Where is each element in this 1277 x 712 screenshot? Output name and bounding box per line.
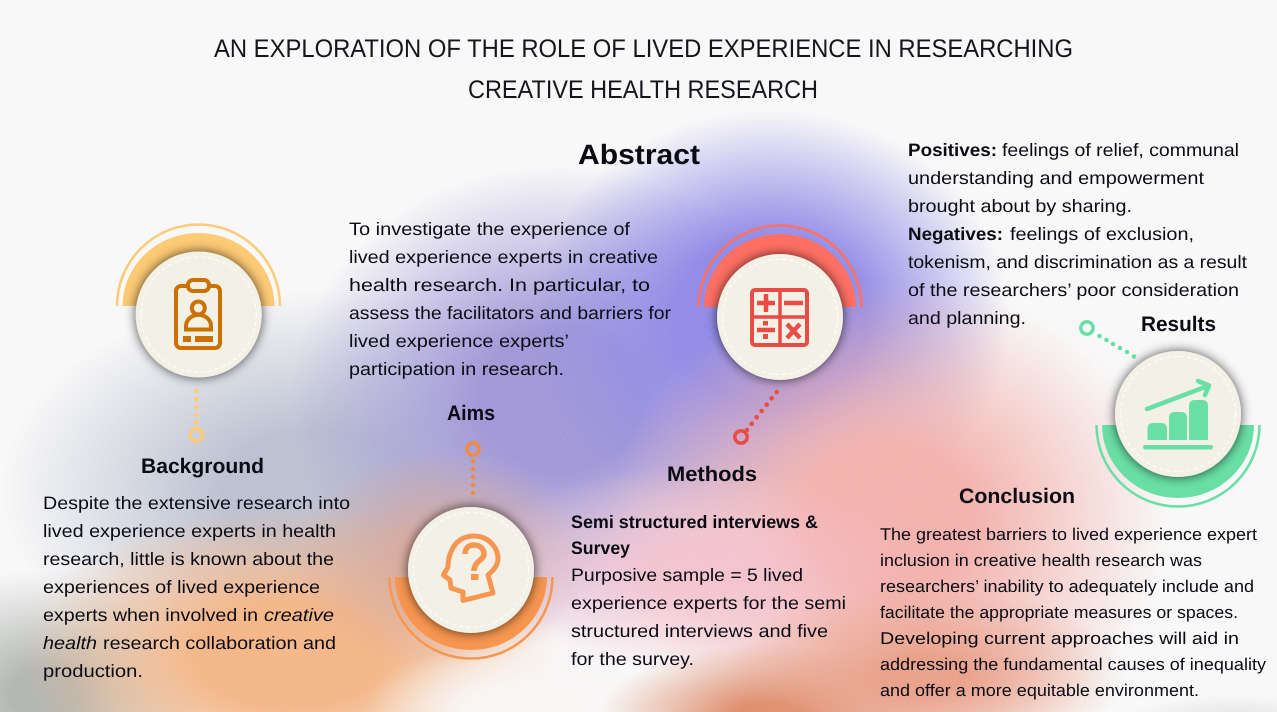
panel: conclusion text: facilitate the appropriate measures or spaces. [880, 603, 1238, 622]
panel: results text: brought about by sharing. [908, 196, 1132, 216]
panel: aims text: health research. In particular, to [349, 275, 650, 295]
icon: head with question mark [444, 536, 498, 600]
panel: background text: experiences of lived experience [43, 577, 320, 597]
panel: conclusion text: inclusion in creative health research was [880, 551, 1202, 570]
panel: background text: research collaboration and [103, 633, 336, 653]
panel: conclusion text: researchers’ inability to adequately include and [880, 577, 1254, 596]
panel: methods text [571, 463, 846, 669]
node: aims [390, 443, 552, 658]
panel: results text [908, 140, 1247, 328]
panel: background text: lived experience experts in health [43, 521, 336, 541]
panel: background text: Despite the extensive research into [43, 493, 350, 513]
panel: methods text: Semi structured interviews & [571, 512, 818, 532]
panel: methods text: for the survey. [571, 649, 694, 669]
heading: results: Results [1141, 313, 1216, 336]
panel: results text: tokenism, and discrimination as a result [908, 252, 1247, 272]
node: results [1081, 322, 1260, 506]
panel: results text: feelings of exclusion, [1010, 224, 1194, 244]
panel: results text: Negatives: [908, 224, 1003, 244]
connector dots [1081, 322, 1136, 359]
panel: conclusion text: Conclusion [959, 485, 1075, 508]
panel: results text: of the researchers’ poor consideration [908, 280, 1239, 300]
heading: aims: Aims [447, 402, 495, 425]
icon: id badge clipboard [176, 280, 220, 348]
panel: aims text: To investigate the experience of [349, 219, 631, 239]
panel: conclusion text: The greatest barriers to lived experience expert [880, 525, 1257, 544]
panel: background text: creative [264, 605, 334, 625]
panel: aims text: participation in research. [349, 359, 564, 379]
panel: results text: understanding and empowerment [908, 168, 1204, 188]
title [214, 35, 1073, 104]
panel: aims text: assess the facilitators and barriers for [349, 303, 671, 323]
panel: results text: and planning. [908, 308, 1026, 328]
panel: background text: health [43, 633, 97, 653]
panel: background text [43, 455, 350, 681]
node: background [117, 225, 280, 441]
panel: methods text: experience experts for the semi [571, 593, 846, 613]
panel: aims text: lived experience experts in creative [349, 247, 658, 267]
panel: background text: Background [141, 455, 264, 478]
title: AN EXPLORATION OF THE ROLE OF LIVED EXPERIENCE IN RESEARCHING [214, 35, 1073, 63]
connector dots [467, 443, 479, 495]
icon: calculator [752, 290, 807, 345]
panel: background text: production. [43, 661, 143, 681]
icon: rising bar chart [1143, 381, 1213, 450]
panel: conclusion text: Developing current approaches will aid in [880, 629, 1239, 648]
panel: conclusion text: addressing the fundamental causes of inequality [880, 655, 1267, 674]
abstract heading: Abstract [578, 139, 700, 170]
panel: background text: research, little is known about the [43, 549, 334, 569]
panel: conclusion text [880, 485, 1267, 700]
title: CREATIVE HEALTH RESEARCH [468, 76, 818, 104]
panel: background text: experts when involved in [43, 605, 258, 625]
node: methods [698, 225, 862, 443]
panel: conclusion text: and offer a more equitable environment. [880, 681, 1199, 700]
panel: aims text: lived experience experts’ [349, 331, 569, 351]
panel: methods text: Methods [667, 463, 757, 486]
panel: results text: feelings of relief, communal [1002, 140, 1239, 160]
connector dots [190, 389, 202, 441]
panel: methods text: structured interviews and five [571, 621, 828, 641]
panel: methods text: Purposive sample = 5 lived [571, 565, 803, 585]
panel: results text: Positives: [908, 140, 997, 160]
panel: methods text: Survey [571, 538, 630, 558]
connector dots [735, 390, 779, 443]
panel: aims text [349, 219, 671, 379]
